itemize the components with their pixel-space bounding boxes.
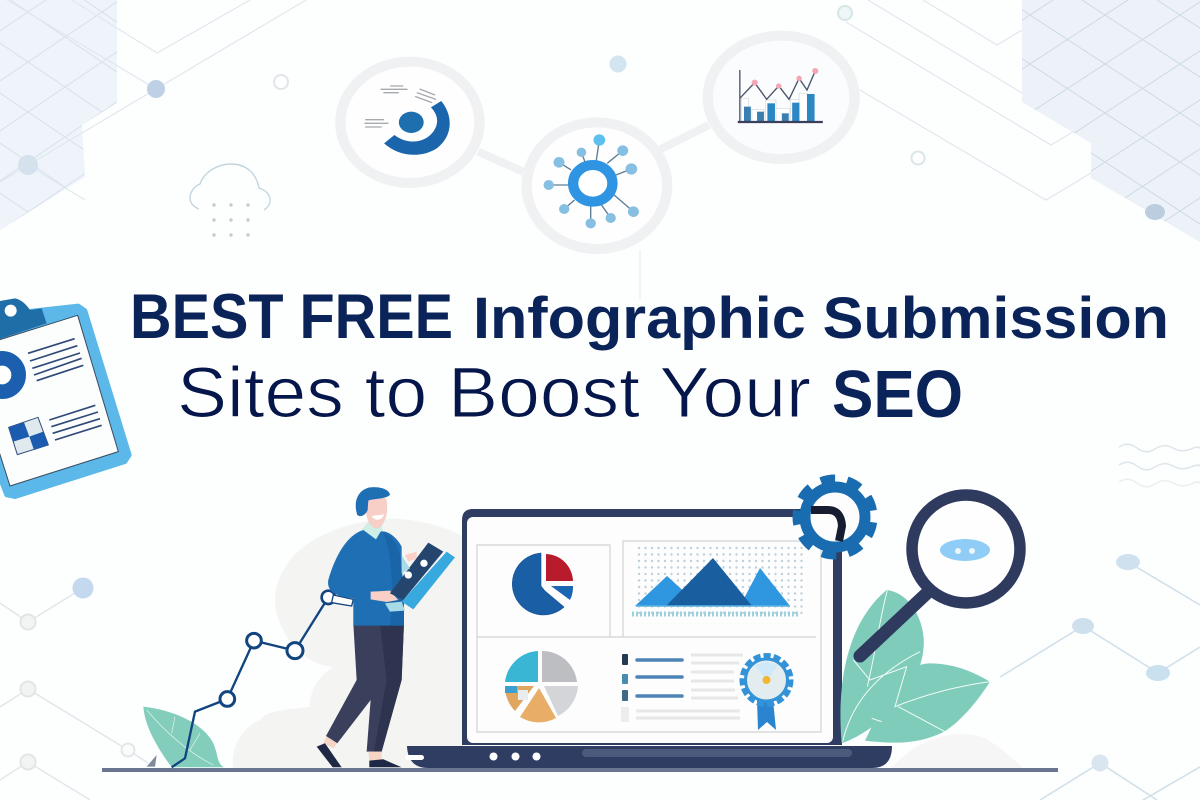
sweater — [328, 530, 404, 626]
title line 1: Infographic Submission — [473, 286, 1169, 351]
list rows — [621, 654, 743, 722]
ground line — [102, 768, 1058, 772]
icon: donut gauge — [340, 62, 479, 183]
title line 1: BEST FREE — [130, 282, 453, 352]
hair — [356, 487, 390, 516]
line chart — [172, 591, 353, 767]
laptop — [405, 509, 892, 768]
neck and collar — [362, 518, 383, 540]
segmented pie chart — [505, 651, 578, 722]
dashboard panel outlines — [477, 541, 821, 732]
title line 2: SEO — [832, 357, 963, 432]
ankles — [323, 737, 382, 761]
person with rising line chart — [172, 487, 455, 767]
right leaves — [840, 590, 990, 743]
title line 2: Sites to Boost Your — [177, 354, 811, 433]
wave decoration — [1119, 444, 1200, 487]
shoes — [317, 743, 402, 767]
hands — [371, 552, 417, 602]
legs — [326, 623, 404, 752]
small left leaf — [143, 707, 224, 767]
head — [365, 496, 387, 528]
laptop screen frame — [462, 509, 842, 745]
background corner grid: top right — [1022, 0, 1200, 242]
gear — [793, 475, 877, 559]
tablet — [390, 543, 443, 600]
blue and red pie chart — [512, 553, 573, 615]
magnifying glass — [860, 495, 1020, 656]
connected icon circles — [340, 36, 855, 249]
icon: clipboard — [0, 298, 129, 497]
laptop base — [405, 746, 892, 768]
award rosette — [742, 656, 790, 730]
icon: line and bar chart — [708, 36, 855, 159]
connector lines — [478, 125, 709, 172]
title line 1 — [130, 282, 1169, 352]
ground shapes behind figure — [233, 518, 1022, 768]
icon: cloud — [190, 164, 270, 237]
icon: network hub — [527, 122, 667, 249]
background corner grid: top left — [0, 0, 117, 230]
mountain chart — [632, 544, 803, 614]
